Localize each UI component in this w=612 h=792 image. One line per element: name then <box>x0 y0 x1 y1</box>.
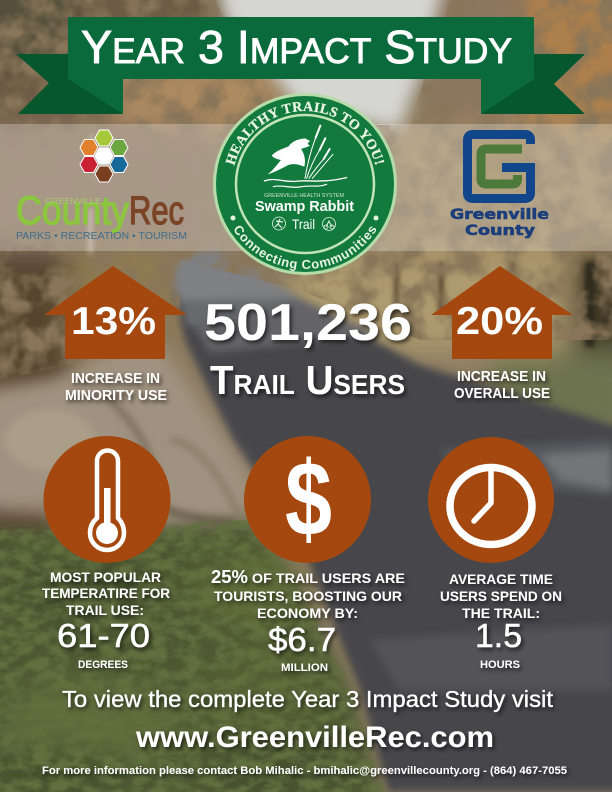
icon: rabbit and reeds <box>264 126 347 187</box>
ribbon main band <box>68 17 534 79</box>
caption: USERS SPEND ON <box>440 588 562 604</box>
wordmark: CountyRec: County <box>16 189 129 233</box>
caption: INCREASE IN <box>71 370 160 387</box>
caption: OVERALL USE <box>454 385 550 402</box>
caption: HOURS <box>480 659 520 671</box>
icon: up arrow <box>44 266 187 359</box>
caption: MINORITY USE <box>65 387 167 404</box>
website: www.GreenvilleRec.com <box>135 721 494 754</box>
icon: dollar sign: $ <box>285 440 332 558</box>
headline stat: 501,236 trail users <box>204 294 412 403</box>
contact line: For more information please contact Bob Mihalic - bmihalic@greenvillecounty.org - (864) 467-7055 <box>42 765 567 777</box>
seal rings <box>213 93 397 275</box>
label: TRAIL USERS <box>210 357 405 403</box>
call to action <box>42 686 567 777</box>
title text: YEAR 3 IMPACT STUDY <box>81 21 512 73</box>
icon: runner <box>272 217 286 230</box>
caption: THE TRAIL: <box>462 605 540 621</box>
caption <box>454 368 550 402</box>
caption: 25% OF TRAIL USERS ARE <box>211 567 405 587</box>
icon: thermometer <box>44 436 170 563</box>
seal text: sponsor: GREENVILLE HEALTH SYSTEM <box>264 193 344 199</box>
caption: INCREASE IN <box>457 368 546 385</box>
tagline: PARKS • RECREATION • TOURISM <box>16 230 187 242</box>
wordmark: CountyRec: GREENVILLE <box>45 197 101 206</box>
stat: temperature <box>42 436 170 671</box>
icon: dollar sign <box>244 436 371 563</box>
wordmark: Greenville <box>450 207 549 223</box>
caption: TOURISTS, BOOSTING OUR <box>214 588 402 604</box>
caption: ECONOMY BY: <box>257 605 358 621</box>
caption <box>211 567 405 674</box>
translucent logo band <box>0 124 612 251</box>
caption <box>65 370 167 404</box>
icon: up arrow <box>431 266 573 359</box>
seal text: top arc: HEALTHY TRAILS TO YOU! <box>225 102 384 166</box>
caption: 61-70 <box>57 617 150 654</box>
caption: MILLION <box>281 662 328 674</box>
arrow stat: 20% overall use <box>431 266 573 402</box>
seal text: Trail: Trail <box>292 216 315 232</box>
icon: G mark <box>468 134 530 198</box>
caption <box>42 569 170 671</box>
ribbon tail: left <box>16 54 123 114</box>
wordmark <box>450 207 549 239</box>
icon: cyclist <box>322 218 336 230</box>
arrow stat: 13% minority use <box>44 266 187 404</box>
caption: $6.7 <box>268 621 336 658</box>
caption: TEMPERATIRE FOR <box>42 585 170 601</box>
icon: clock <box>428 437 554 563</box>
stat: economy <box>211 436 405 674</box>
seal text: Swamp Rabbit: Swamp Rabbit <box>255 198 354 215</box>
seal dots <box>230 216 378 220</box>
logo: Greenville County Rec <box>16 130 187 242</box>
caption: 1.5 <box>475 617 522 654</box>
value: 20% <box>456 300 543 343</box>
wordmark: County <box>465 223 535 239</box>
stat: time on trail <box>428 437 562 671</box>
caption <box>440 571 562 671</box>
number: 501,236 <box>204 294 412 352</box>
icon: hexagon cluster <box>80 130 128 182</box>
caption: TRAIL USE: <box>66 602 144 618</box>
caption: DEGREES <box>78 659 128 671</box>
caption: AVERAGE TIME <box>449 571 553 587</box>
wordmark: CountyRec: Rec <box>129 189 184 233</box>
value: 13% <box>71 300 156 343</box>
caption: MOST POPULAR <box>50 569 161 585</box>
seal text: bottom arc: Connecting Communities <box>234 226 376 271</box>
invitation line: To view the complete Year 3 Impact Study visit <box>62 686 554 712</box>
title ribbon <box>16 17 585 114</box>
logo: Greenville County <box>450 134 549 239</box>
ribbon tail: right <box>481 54 585 114</box>
logo: Swamp Rabbit Trail seal <box>213 93 397 275</box>
